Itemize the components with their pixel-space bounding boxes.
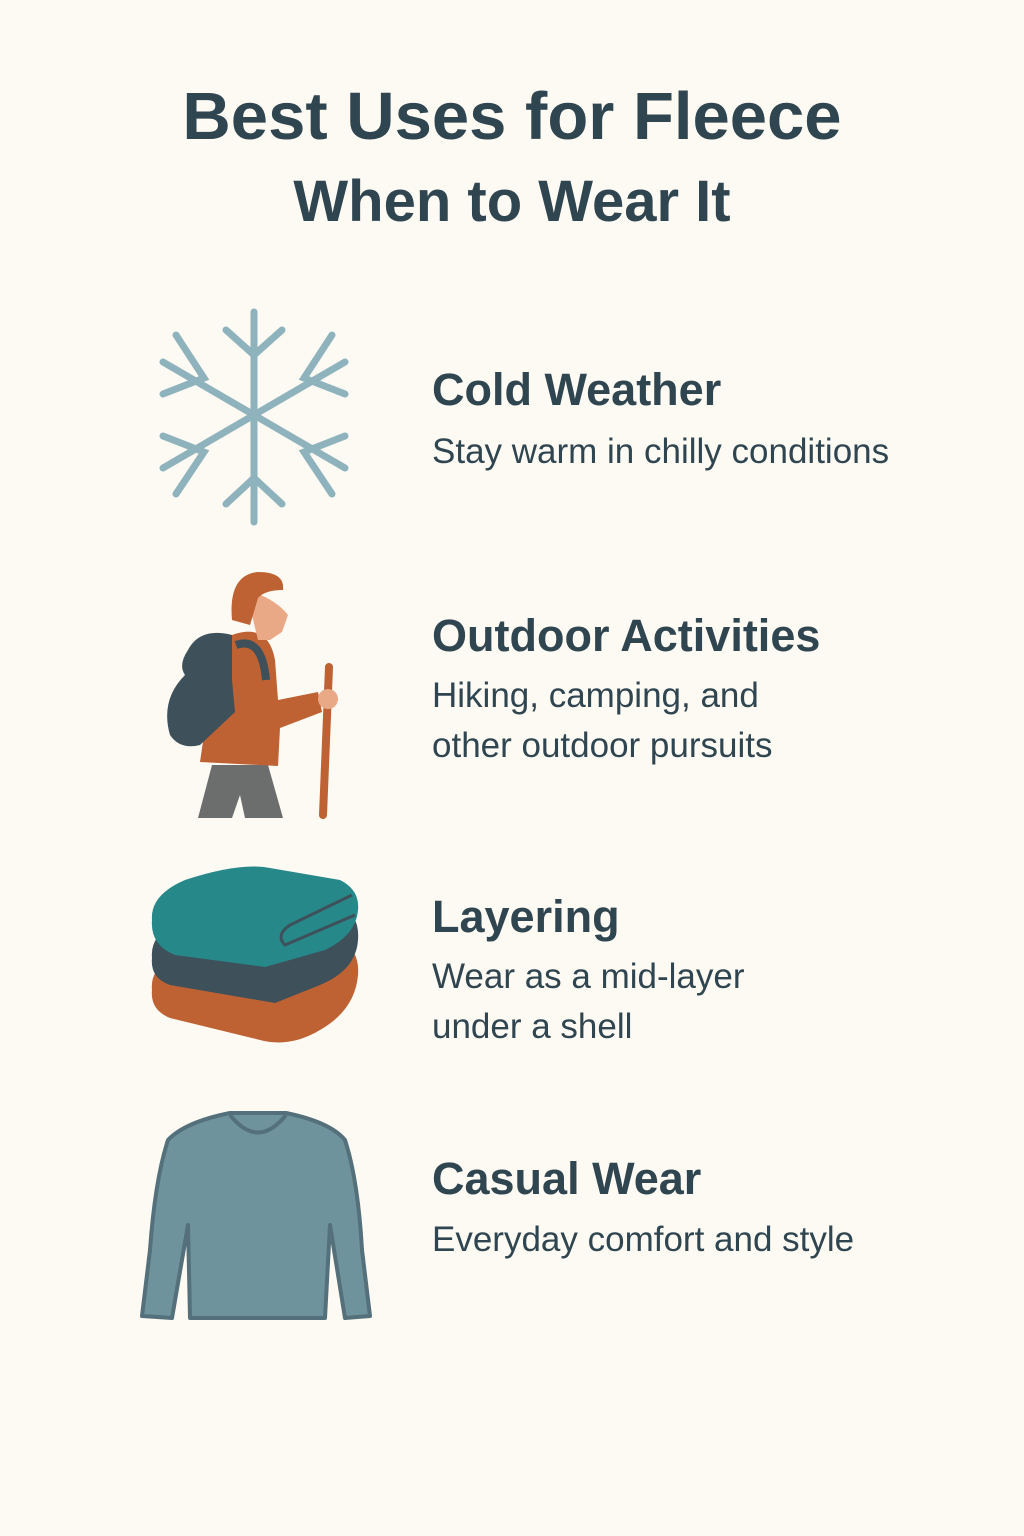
text: outdoor activities: Hiking, camping, and [432, 676, 759, 715]
icon: sweater [140, 1111, 372, 1320]
icon: folded blankets [152, 866, 358, 1042]
icon: hiker [167, 572, 338, 819]
text: layering: Wear as a mid-layer [432, 957, 745, 996]
text: outdoor activities: other outdoor pursuits [432, 726, 772, 765]
title: Best Uses for Fleece [182, 79, 842, 154]
text: outdoor activities [432, 676, 772, 765]
subtitle: When to Wear It [293, 169, 731, 234]
text: casual wear: Everyday comfort and style [432, 1220, 854, 1259]
text: layering [432, 957, 745, 1046]
heading: casual wear: Casual Wear [432, 1153, 701, 1204]
text: layering: under a shell [432, 1007, 632, 1046]
heading: cold weather: Cold Weather [432, 364, 721, 415]
heading: outdoor activities: Outdoor Activities [432, 610, 820, 661]
text: cold weather: Stay warm in chilly conditions [432, 432, 889, 471]
icon: snowflake [160, 308, 348, 526]
heading: layering: Layering [432, 891, 620, 942]
